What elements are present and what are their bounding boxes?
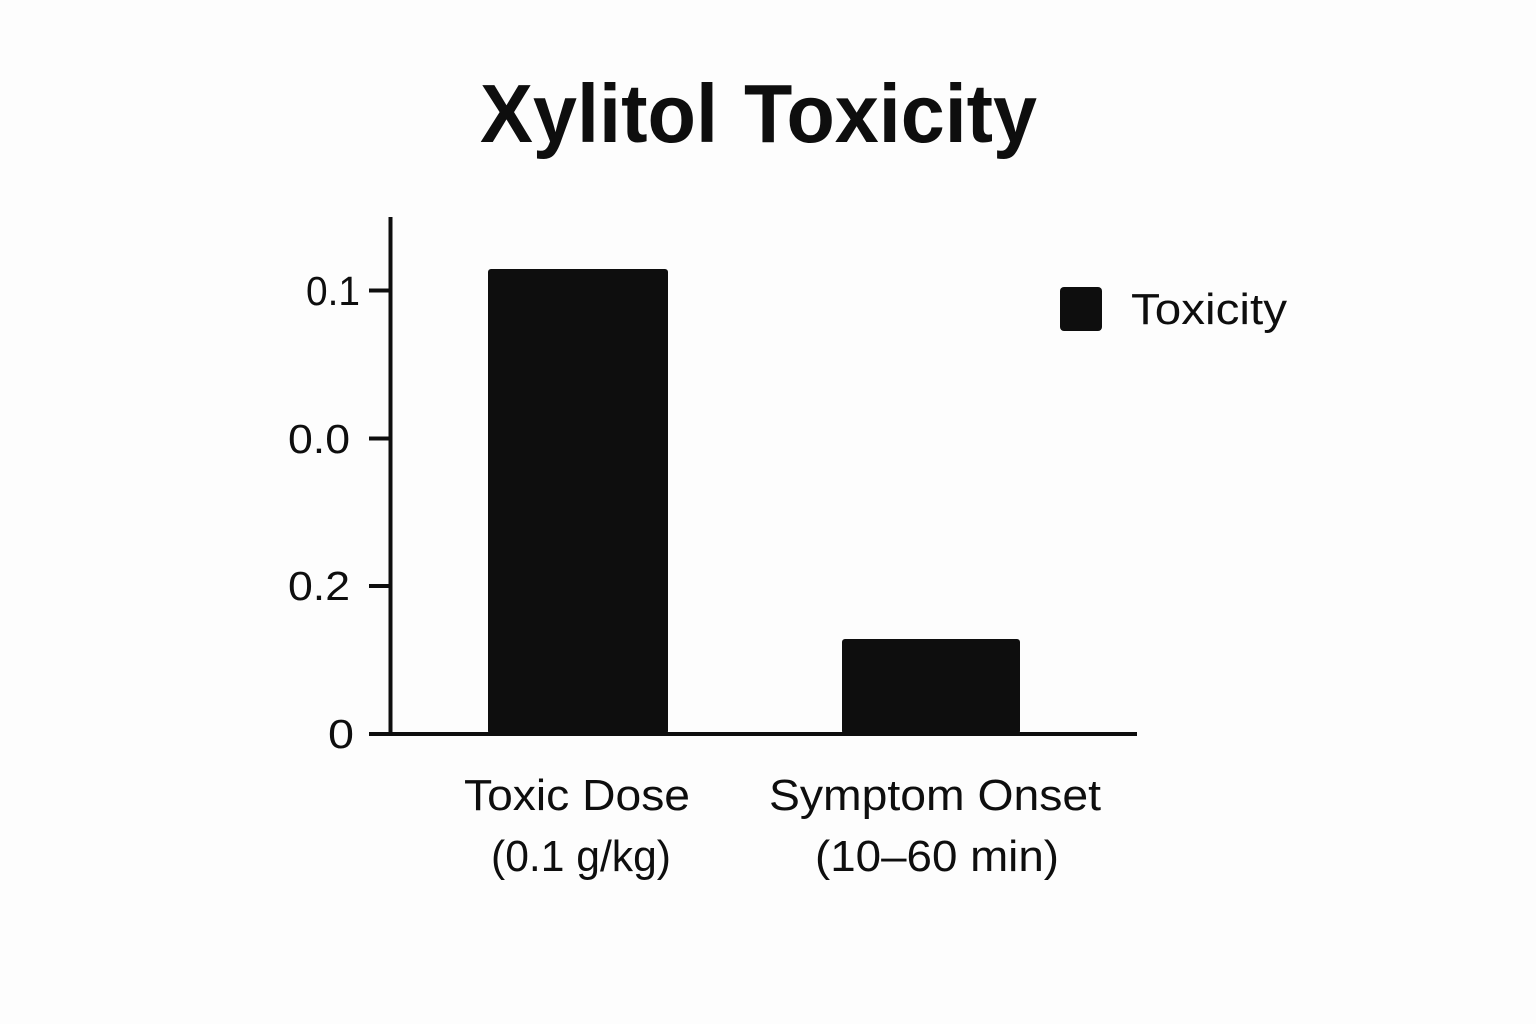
bar: symptom onset (842, 639, 1020, 734)
title: Xylitol (480, 67, 718, 160)
x label: toxic dose: (0.1 g/kg) (491, 832, 671, 881)
x label: symptom onset: Symptom Onset (769, 771, 1101, 820)
legend (1060, 285, 1287, 334)
x axis (369, 732, 1137, 736)
x label: toxic dose: Toxic Dose (464, 771, 690, 820)
y axis (369, 217, 392, 736)
y axis tick labels: 0.1 (306, 268, 360, 314)
y axis tick labels: 0.0 (288, 416, 350, 462)
x label: symptom onset: (10–60 min) (815, 832, 1059, 881)
x label: toxic dose (464, 771, 690, 881)
title (480, 67, 1037, 160)
y axis tick labels: 0 (328, 711, 354, 757)
title: Toxicity (744, 67, 1037, 160)
y axis tick labels: 0.2 (288, 563, 350, 609)
x label: symptom onset (769, 771, 1101, 881)
y axis tick labels (288, 268, 360, 757)
bar: toxic dose (488, 269, 668, 734)
legend swatch (1060, 287, 1102, 331)
legend label: Toxicity (1131, 285, 1287, 334)
bar chart (288, 217, 1137, 881)
